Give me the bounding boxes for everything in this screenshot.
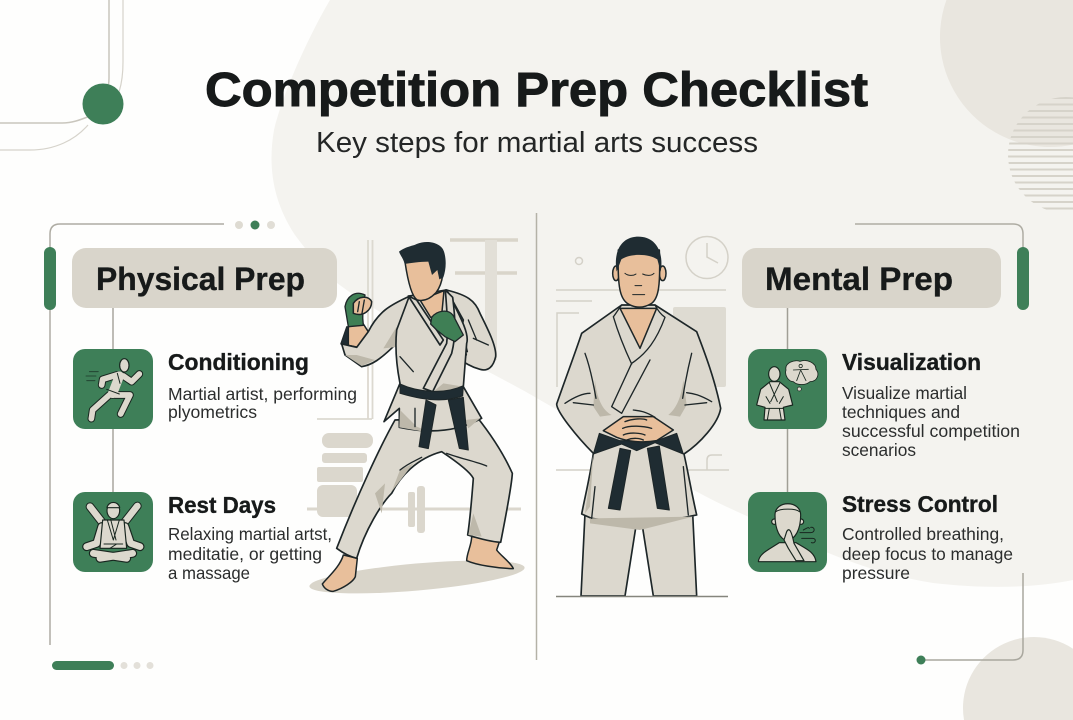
clasped hands xyxy=(603,410,673,442)
item text: stress control: deep focus to manage xyxy=(842,544,1013,564)
top right decorative circle xyxy=(940,0,1073,147)
bottom progress marker xyxy=(52,661,154,670)
item text: visualization: Visualize martial xyxy=(842,383,967,403)
connector line xyxy=(112,308,114,492)
title: Competition Prep Checklist xyxy=(205,64,868,117)
belt xyxy=(593,433,683,510)
fighter head xyxy=(399,242,446,300)
panel: physical prep xyxy=(44,220,357,670)
fighter left arm xyxy=(341,293,410,367)
subtitle: Key steps for martial arts success xyxy=(316,127,758,159)
item title: conditioning: Conditioning xyxy=(168,349,309,375)
item text: stress control: Controlled breathing, xyxy=(842,524,1004,544)
fighter torso and jacket xyxy=(384,290,482,433)
item text: stress control: pressure xyxy=(842,563,910,583)
left frame line xyxy=(50,224,224,645)
room background, right side xyxy=(556,236,729,470)
panel: mental prep xyxy=(742,224,1029,664)
right frame line xyxy=(855,224,1023,247)
green pill accent xyxy=(1017,247,1029,310)
fighter figure xyxy=(322,242,513,591)
item title: visualization: Visualization xyxy=(842,349,981,375)
icon: visualization xyxy=(748,349,827,429)
fighter feet xyxy=(322,537,513,591)
fighter right arm xyxy=(447,290,496,370)
item text: visualization: successful competition xyxy=(842,421,1020,441)
top left corner lines and dot xyxy=(0,0,124,150)
heading background xyxy=(72,248,337,308)
bottom right decorative circle xyxy=(963,637,1073,720)
item text: rest days xyxy=(168,524,332,583)
heading: mental prep: Mental Prep xyxy=(765,261,953,297)
background blob xyxy=(272,0,1073,587)
item text: conditioning: plyometrics xyxy=(168,402,257,422)
heading: physical prep: Physical Prep xyxy=(96,261,305,297)
item text: conditioning: Martial artist, performing xyxy=(168,384,357,404)
icon: massage and meditation xyxy=(73,492,153,572)
green pill accent xyxy=(44,247,56,310)
centre divider xyxy=(536,213,538,660)
item text: rest days: a massage xyxy=(168,563,250,583)
jacket body xyxy=(557,305,721,530)
item text: visualization xyxy=(842,383,1020,460)
standing figure xyxy=(557,237,721,596)
item text: visualization: techniques and xyxy=(842,402,960,422)
item text: visualization: scenarios xyxy=(842,440,916,460)
gym background illustration xyxy=(307,240,526,600)
frame dots xyxy=(235,220,275,230)
floor line xyxy=(556,596,728,598)
top right striped circle xyxy=(1000,98,1073,208)
item title: rest days: Rest Days xyxy=(168,492,276,518)
fighter trousers xyxy=(337,417,512,558)
icon: runner xyxy=(73,349,153,429)
fighter glove right xyxy=(431,311,463,342)
head xyxy=(613,237,666,307)
item text: conditioning xyxy=(168,384,357,422)
fighter belt xyxy=(400,384,468,450)
icon: breathing xyxy=(748,492,827,572)
heading background xyxy=(742,248,1001,308)
connector line xyxy=(786,308,788,492)
bottom right connector and dot xyxy=(916,573,1023,664)
item title: stress control: Stress Control xyxy=(842,491,998,517)
trousers xyxy=(581,513,697,596)
item text: stress control xyxy=(842,524,1013,583)
item text: rest days: meditatie, or getting xyxy=(168,544,322,564)
item text: rest days: Relaxing martial artst, xyxy=(168,524,332,544)
